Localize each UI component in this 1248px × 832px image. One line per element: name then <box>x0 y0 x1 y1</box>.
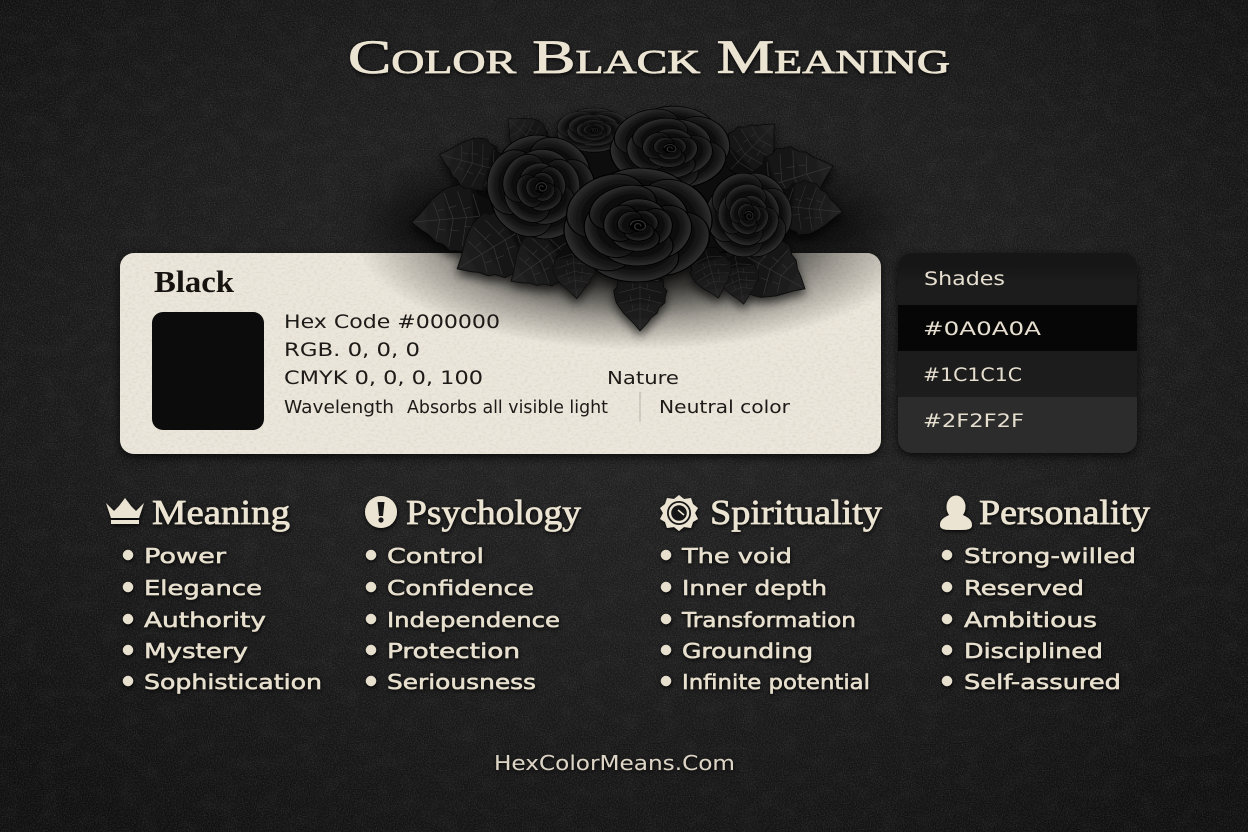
heading: spirituality: Spirituality <box>710 493 883 532</box>
list: personality <box>942 544 1136 694</box>
list: meaning: Elegance <box>144 576 262 600</box>
shade row 1C1C1C <box>898 351 1137 397</box>
list: psychology: Confidence <box>387 576 534 600</box>
shade labels: #2F2F2F <box>923 410 1024 432</box>
card heading: Black <box>154 264 235 299</box>
list: spirituality: Transformation <box>681 608 856 632</box>
list: meaning: Power <box>144 544 227 568</box>
shade labels <box>923 268 1041 432</box>
icon: sun emblem <box>660 495 698 531</box>
list: psychology: Protection <box>387 639 520 663</box>
column: psychology <box>365 493 582 694</box>
list: personality: Strong-willed <box>964 544 1136 568</box>
heading: psychology: Psychology <box>406 493 582 532</box>
heading: meaning: Meaning <box>152 493 290 532</box>
icon: person <box>940 496 972 530</box>
list: meaning: Authority <box>144 608 266 632</box>
shade labels: Shades <box>924 268 1005 290</box>
shadow behind flowers <box>375 163 885 287</box>
list: spirituality: Infinite potential <box>682 670 870 694</box>
color values: Hex Code #000000 <box>284 311 500 333</box>
list: spirituality: Grounding <box>682 639 813 663</box>
list: personality: Reserved <box>964 576 1084 600</box>
shade row 0A0A0A <box>898 305 1137 351</box>
list: meaning: Sophistication <box>144 670 322 694</box>
list: meaning: Mystery <box>144 639 248 663</box>
heading: personality: Personality <box>979 493 1151 532</box>
icon: exclamation <box>365 496 397 528</box>
color values: RGB. 0, 0, 0 <box>284 339 420 361</box>
list: spirituality: Inner depth <box>682 576 827 600</box>
panel: shades <box>898 253 1137 453</box>
list: psychology: Control <box>387 544 484 568</box>
footer: HexColorMeans.Com <box>494 751 735 775</box>
shade labels: #0A0A0A <box>923 318 1041 340</box>
list: psychology: Independence <box>387 608 560 632</box>
list: meaning <box>123 544 322 694</box>
color values: Wavelength <box>284 397 394 418</box>
title: Color Black Meaning <box>348 31 950 84</box>
list: spirituality: The void <box>681 544 792 568</box>
list: psychology <box>366 544 560 694</box>
list: psychology: Seriousness <box>387 670 536 694</box>
column: meaning <box>106 493 322 694</box>
list: personality: Ambitious <box>964 608 1097 632</box>
shade row 2F2F2F <box>898 397 1137 453</box>
icon: crown <box>106 498 144 524</box>
color swatch <box>152 312 264 430</box>
color values <box>284 311 791 418</box>
list: personality: Self-assured <box>964 670 1121 694</box>
list: spirituality <box>661 544 870 694</box>
color values: Neutral color <box>659 397 791 418</box>
color values: CMYK 0, 0, 0, 100 <box>284 367 483 389</box>
column: personality <box>940 493 1151 694</box>
panel: color info card <box>116 252 885 462</box>
color values: Absorbs all visible light <box>407 397 608 418</box>
color values: Nature <box>607 368 679 389</box>
column: spirituality <box>660 493 883 694</box>
list: personality: Disciplined <box>964 639 1103 663</box>
illustration: black roses <box>408 93 846 331</box>
shade labels: #1C1C1C <box>923 364 1022 386</box>
